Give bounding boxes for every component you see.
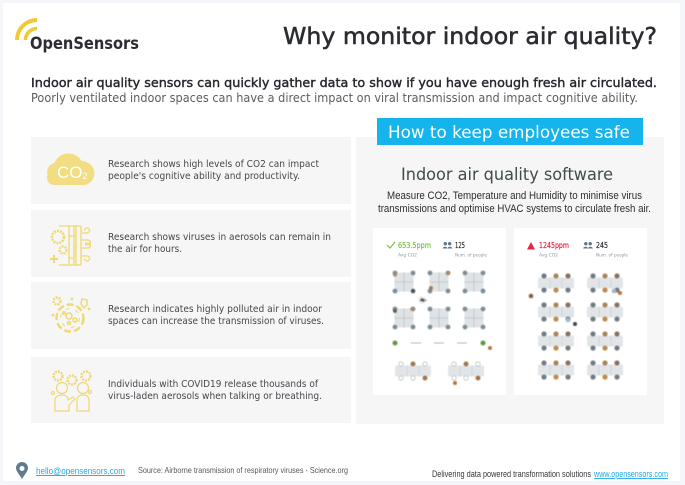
- text: CO2 research: [108, 159, 319, 182]
- panel: indoor air quality software: [356, 118, 664, 424]
- people count: Num. of people: [596, 252, 628, 258]
- footer: source: Source: Airborne transmission of respiratory viruses - Science.org: [138, 465, 348, 475]
- text: CO2 research: people's cognitive ability and productivity.: [108, 171, 300, 182]
- panel: aerosols research: [31, 210, 351, 277]
- icon: people: [583, 242, 593, 248]
- people count: [596, 241, 628, 258]
- footer: location pin: [16, 462, 28, 479]
- text: aerosols research: the air for hours.: [108, 244, 182, 255]
- floor plan: meeting tables: [393, 271, 485, 329]
- panel: polluted air research: [31, 282, 351, 349]
- logo: OpenSensors: OpenSensors: [30, 34, 139, 53]
- people count: [455, 241, 487, 258]
- dashboard card: alert office: [514, 228, 647, 395]
- icon: two people with virus particles: [52, 372, 92, 411]
- text: aerosols research: [108, 232, 331, 255]
- text: COVID19 aerosols: virus-laden aerosols when talking or breathing.: [108, 391, 322, 402]
- footer: tagline: www.opensensors.com: [593, 469, 668, 479]
- description: [378, 190, 651, 215]
- description: transmissions and optimise HVAC systems to circulate fresh air.: [378, 203, 651, 215]
- footer: email: hello@opensensors.com: [36, 466, 125, 477]
- CO2 reading: 653.5ppm: [398, 241, 431, 250]
- intro text block: Indoor air quality sensors can quickly gather data to show if you have enough fresh air circulated.: [31, 75, 657, 90]
- text: COVID19 aerosols: Individuals with COVID19 release thousands of: [108, 379, 319, 390]
- CO2 reading: [539, 241, 569, 258]
- people count: 245: [596, 241, 608, 250]
- text: aerosols research: Research shows viruses in aerosols can remain in: [108, 232, 331, 243]
- floor plan: status row: [392, 340, 492, 350]
- CO2 reading: Avg CO2: [539, 252, 558, 258]
- icon: check mark: [387, 242, 395, 248]
- CO2 reading: [398, 241, 431, 258]
- icon: window with viruses and wind: [50, 226, 90, 265]
- intro text block: [31, 75, 657, 105]
- text: polluted air research: Research indicates highly polluted air in indoor: [108, 304, 322, 315]
- text: CO2 research: Research shows high levels of CO2 can impact: [108, 159, 319, 170]
- title: Why monitor indoor air quality?: [283, 24, 657, 50]
- icon: CO2 cloud: CO: [57, 163, 82, 182]
- heading: how to keep employees safe: [377, 118, 643, 145]
- CO2 reading: 1245ppm: [539, 241, 569, 250]
- icon: people: [443, 242, 452, 248]
- heading: how to keep employees safe: How to keep employees safe: [388, 123, 630, 143]
- floor plan: desks: [395, 362, 484, 385]
- people count: Num. of people: [455, 252, 487, 258]
- panel: COVID19 aerosols: [31, 357, 351, 423]
- people count: 125: [455, 241, 465, 250]
- panel: CO2 research: [31, 137, 351, 204]
- icon: warning triangle: [527, 242, 535, 250]
- description: Measure CO2, Temperature and Humidity to minimise virus: [387, 190, 642, 202]
- dashboard card: healthy office: [373, 228, 506, 395]
- intro text block: Poorly ventilated indoor spaces can have a direct impact on viral transmission and impact cognitive ability.: [31, 90, 638, 105]
- floor plan: desks: [529, 273, 623, 380]
- text: polluted air research: spaces can increase the transmission of viruses.: [108, 316, 324, 327]
- logo: OpenSensors: [17, 20, 139, 53]
- CO2 reading: Avg CO2: [398, 252, 417, 258]
- icon: CO2 cloud: [47, 154, 94, 185]
- text: COVID19 aerosols: [108, 379, 322, 402]
- text: polluted air research: [108, 304, 324, 327]
- footer: tagline: Delivering data powered transformation solutions: [432, 469, 591, 479]
- icon: virus particles: [52, 298, 90, 332]
- icon: CO2 cloud: 2: [82, 171, 88, 181]
- heading: indoor air quality software: Indoor air quality software: [401, 165, 613, 184]
